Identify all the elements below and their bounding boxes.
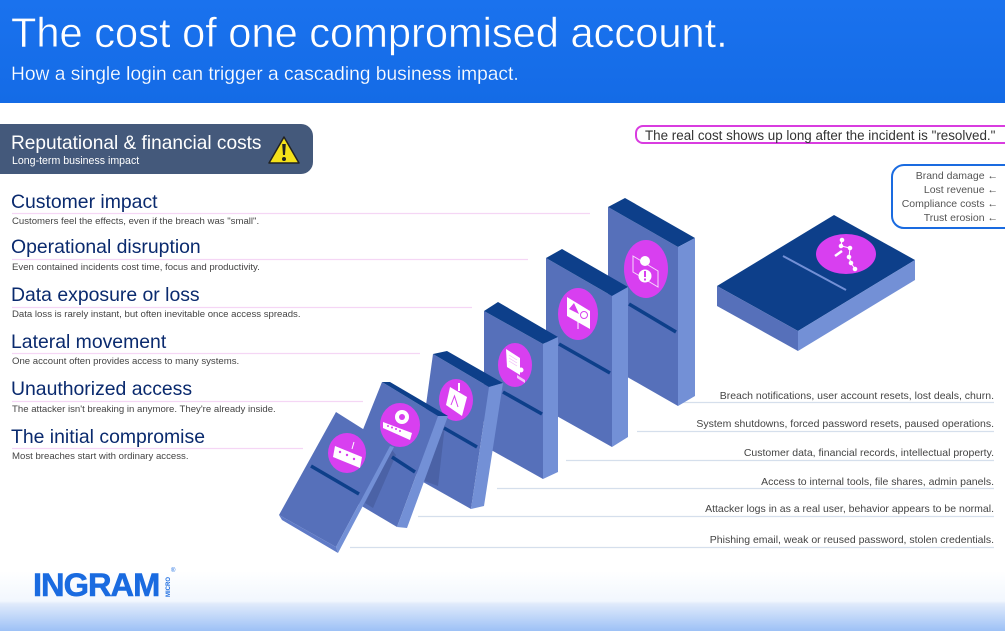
- heading: Lateral movement: [11, 331, 166, 353]
- header band: [0, 0, 1005, 103]
- impact detail: customer: Breach notifications, user account resets, lost deals, churn.: [720, 390, 994, 402]
- stage: the initial compromise: [11, 426, 205, 462]
- stage: customer impact: [11, 191, 259, 227]
- heading: Unauthorized access: [11, 378, 192, 400]
- description: Even contained incidents cost time, focus and productivity.: [12, 262, 260, 273]
- logo wordmark: INGRAM: [33, 567, 159, 603]
- impact detail: lateral movement: Access to internal tools, file shares, admin panels.: [761, 476, 994, 488]
- impact detail: operations: System shutdowns, forced password resets, paused operations.: [696, 418, 994, 430]
- heading: Customer impact: [11, 191, 158, 213]
- description: Data loss is rarely instant, but often inevitable once access spreads.: [12, 309, 300, 320]
- icon: bug and password field: [383, 410, 412, 440]
- domino 2: unauthorized access: [338, 382, 448, 528]
- list item: Lost revenue ←: [924, 184, 998, 196]
- icon: file share: [446, 383, 467, 416]
- callout: the real cost: [635, 125, 1005, 144]
- stage: data exposure or loss: [11, 284, 300, 320]
- bottom gradient band: [0, 571, 1005, 631]
- domino 4: data exposure: [484, 302, 558, 479]
- panel: long-term costs list: [891, 164, 1005, 229]
- subtitle: How a single login can trigger a cascading business impact.: [11, 64, 519, 85]
- heading: Operational disruption: [11, 236, 201, 258]
- panel: reputational and financial costs: [0, 124, 313, 174]
- icon: password keypad: [333, 442, 362, 468]
- description: One account often provides access to many systems.: [12, 356, 239, 367]
- stage: lateral movement: [11, 331, 239, 367]
- title: The cost of one compromised account.: [11, 9, 728, 56]
- domino 6: customer impact: [608, 198, 695, 406]
- logo registered mark: ®: [171, 568, 175, 574]
- stage: operational disruption: [11, 236, 260, 273]
- list item: Compliance costs ←: [902, 198, 998, 210]
- panel heading: Reputational & financial costs: [11, 133, 261, 154]
- heading: The initial compromise: [11, 426, 205, 448]
- icon: warning triangle: [268, 136, 300, 164]
- icon: monitor alert: [567, 297, 590, 329]
- callout text: The real cost shows up long after the incident is "resolved.": [645, 128, 995, 143]
- list item: Trust erosion ←: [924, 212, 998, 224]
- impact detail: initial compromise: Phishing email, weak or reused password, stolen credentials.: [710, 534, 994, 546]
- domino 5: operational disruption: [546, 249, 628, 447]
- description: Most breaches start with ordinary access.: [12, 451, 188, 462]
- flat slab: reputational and financial costs: [717, 215, 915, 351]
- description: Customers feel the effects, even if the breach was "small".: [12, 216, 259, 227]
- domino 3: lateral movement: [416, 351, 503, 509]
- heading: Data exposure or loss: [11, 284, 200, 306]
- icon: falling graph: [835, 238, 857, 271]
- stage: unauthorized access: [11, 378, 276, 415]
- description: The attacker isn't breaking in anymore. They're already inside.: [12, 404, 276, 415]
- icon: document and user: [506, 349, 525, 383]
- impact detail: data: Customer data, financial records, intellectual property.: [744, 447, 994, 459]
- domino 1: the initial compromise: [279, 412, 394, 553]
- logo: Ingram Micro: [33, 567, 176, 603]
- panel subheading: Long-term business impact: [12, 155, 139, 167]
- impact detail: unauthorized access: Attacker logs in as a real user, behavior appears to be normal.: [705, 503, 994, 515]
- logo micro: MICRO: [166, 577, 172, 597]
- list item: Brand damage ←: [916, 170, 998, 182]
- icon: money and alert: [633, 256, 658, 287]
